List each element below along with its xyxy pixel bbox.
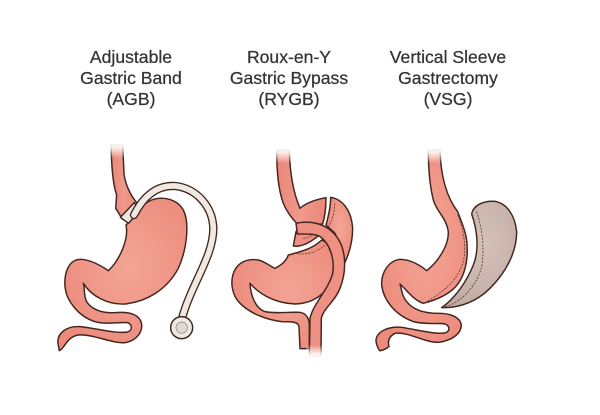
removed portion staple line xyxy=(445,212,483,307)
illustration: adjustable gastric band xyxy=(58,142,213,351)
heading: VSG: Vertical Sleeve xyxy=(390,46,506,66)
heading: VSG: (VSG) xyxy=(424,88,472,108)
heading: RYGB xyxy=(230,46,348,109)
fundus remnant xyxy=(326,197,353,262)
heading: RYGB: (RYGB) xyxy=(258,88,320,108)
sleeve, esophagus and intestine xyxy=(376,150,467,351)
removed stomach portion xyxy=(442,201,517,308)
heading: AGB: Adjustable xyxy=(90,46,172,66)
esophagus xyxy=(111,145,137,219)
heading: VSG xyxy=(390,46,506,109)
heading: VSG: Gastrectomy xyxy=(398,68,498,88)
esophagus and pouch xyxy=(277,150,326,225)
staple lines xyxy=(295,203,335,254)
heading: AGB xyxy=(80,46,182,109)
stomach and intestine xyxy=(58,198,187,351)
heading: AGB: Gastric Band xyxy=(80,68,182,88)
sleeve staple line xyxy=(425,215,465,303)
connecting tube xyxy=(134,186,213,318)
heading: AGB: (AGB) xyxy=(107,88,155,108)
lower pouch remnant xyxy=(293,232,320,246)
gastric band xyxy=(120,203,140,223)
heading: RYGB: Gastric Bypass xyxy=(230,68,348,88)
fade at top of esophagus xyxy=(107,142,127,158)
lower stomach and biliary limb xyxy=(232,240,335,349)
fade at top and bottom xyxy=(273,147,325,358)
illustration: gastric bypass xyxy=(232,147,353,358)
fade at top xyxy=(425,147,443,163)
illustration: vertical sleeve gastrectomy xyxy=(376,147,517,351)
heading: RYGB: Roux-en-Y xyxy=(247,46,331,66)
Roux limb xyxy=(296,222,345,357)
access port xyxy=(171,317,193,339)
